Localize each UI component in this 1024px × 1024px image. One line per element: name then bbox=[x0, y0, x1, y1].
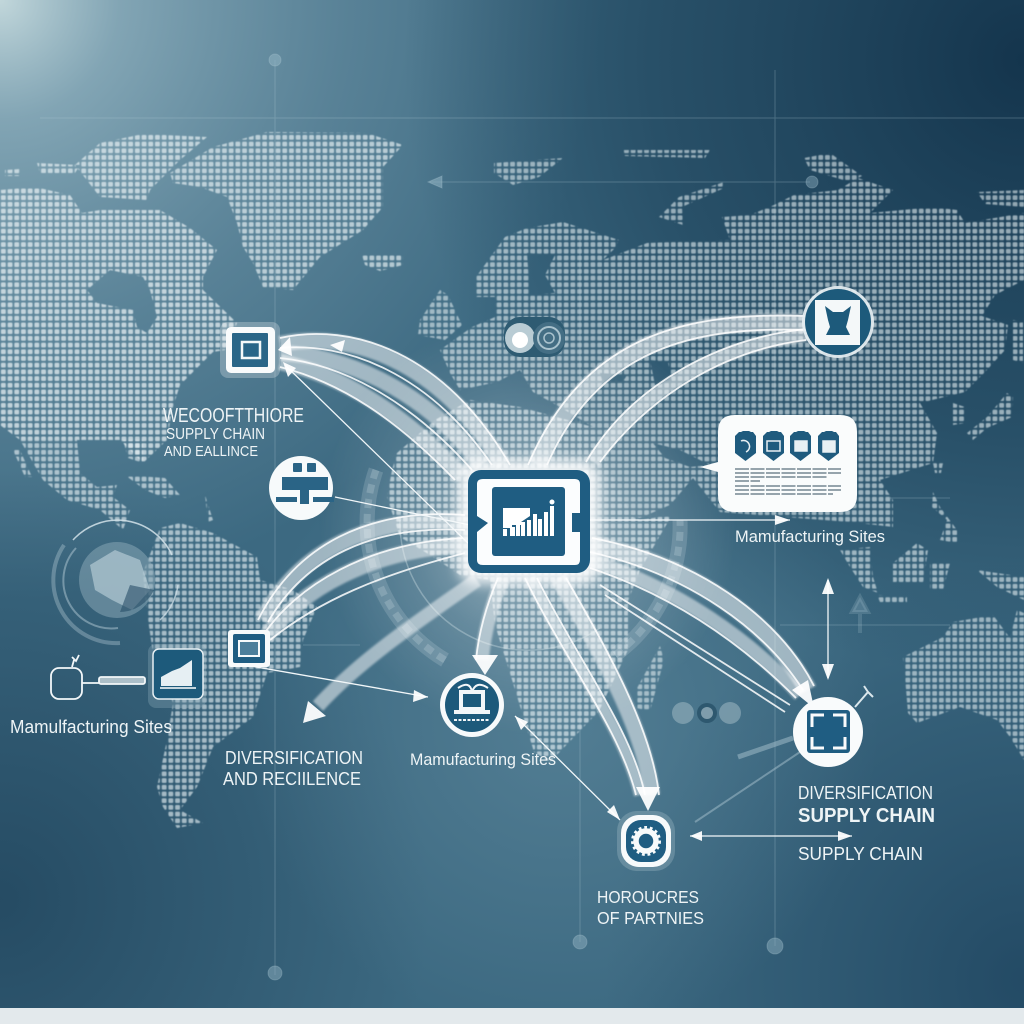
globe emblem bbox=[53, 520, 178, 643]
panel: facilities card bbox=[700, 415, 857, 512]
world map bbox=[0, 132, 1024, 828]
continent: Australia bbox=[903, 610, 1024, 760]
card text lines bbox=[735, 469, 841, 494]
label: diversification and resilience: AND RECIILENCE bbox=[223, 768, 361, 789]
continent: Eurasia bbox=[440, 178, 1024, 527]
label: resources of partners: OF PARTNIES bbox=[597, 908, 704, 928]
label: we offshore heading bbox=[163, 405, 304, 460]
icon: people badge node bbox=[440, 673, 504, 737]
icon: growth chart tile bbox=[148, 644, 206, 708]
footer strip bbox=[0, 1008, 1024, 1024]
label: resources of partners bbox=[597, 887, 704, 928]
hub: central analytics node bbox=[458, 460, 600, 584]
label: diversification supply chain: DIVERSIFICATION bbox=[798, 783, 933, 803]
hub glow bbox=[318, 315, 738, 735]
icon: network node bbox=[793, 686, 873, 767]
label: diversification supply chain bbox=[798, 783, 935, 827]
label: diversification supply chain: SUPPLY CHAIN bbox=[798, 805, 935, 827]
flows: bright strands bbox=[258, 316, 814, 795]
card icons bbox=[735, 431, 839, 461]
icon: device connector bbox=[51, 655, 145, 699]
continent: Arctic islands bbox=[494, 150, 1024, 225]
label: supply chain: SUPPLY CHAIN bbox=[798, 844, 923, 864]
flows: thin connector arrows bbox=[245, 365, 852, 836]
continent: Iceland bbox=[362, 254, 403, 271]
ring behind hub bbox=[367, 470, 680, 660]
icon: dual lens node bbox=[504, 317, 565, 357]
continent: Arctic Canada bbox=[5, 134, 207, 200]
icon: small south america node bbox=[228, 630, 270, 667]
continent: Britain bbox=[418, 290, 462, 340]
label: resources of partners: HOROUCRES bbox=[597, 887, 699, 907]
continent: Mexico and Central America bbox=[13, 440, 213, 530]
label: we offshore heading: WECOOFTTHIORE bbox=[163, 405, 304, 427]
label: we offshore heading: AND EALLINCE bbox=[164, 443, 258, 460]
icon: round org chart node bbox=[269, 456, 334, 520]
flows: wide translucent bands bbox=[262, 322, 808, 795]
icon: asia node bbox=[802, 286, 874, 358]
chart icon bbox=[503, 500, 554, 536]
arrowheads bbox=[278, 337, 852, 841]
label: manufacturing sites center: Mamufacturing Sites bbox=[410, 750, 556, 769]
continent: South America bbox=[143, 523, 317, 828]
icon: gear node bbox=[617, 811, 675, 871]
continent: North America bbox=[0, 187, 237, 463]
label: manufacturing sites right: Mamufacturing Sites bbox=[735, 527, 885, 546]
continent: Southeast Asia bbox=[840, 320, 1024, 603]
label: diversification and resilience: DIVERSIFICATION bbox=[225, 747, 363, 768]
icon: north america node bbox=[220, 322, 280, 378]
label: diversification and resilience bbox=[223, 747, 363, 789]
faded node cluster bbox=[672, 702, 741, 724]
label: we offshore heading: SUPPLY CHAIN bbox=[166, 426, 265, 443]
flows: faded leader lines bbox=[695, 738, 800, 822]
supply flow arrows bbox=[245, 316, 852, 836]
label: manufacturing sites left: Mamulfacturing Sites bbox=[10, 716, 172, 737]
continent: Madagascar bbox=[636, 646, 664, 711]
continent: Greenland bbox=[170, 132, 403, 290]
continent: Africa bbox=[387, 400, 672, 762]
